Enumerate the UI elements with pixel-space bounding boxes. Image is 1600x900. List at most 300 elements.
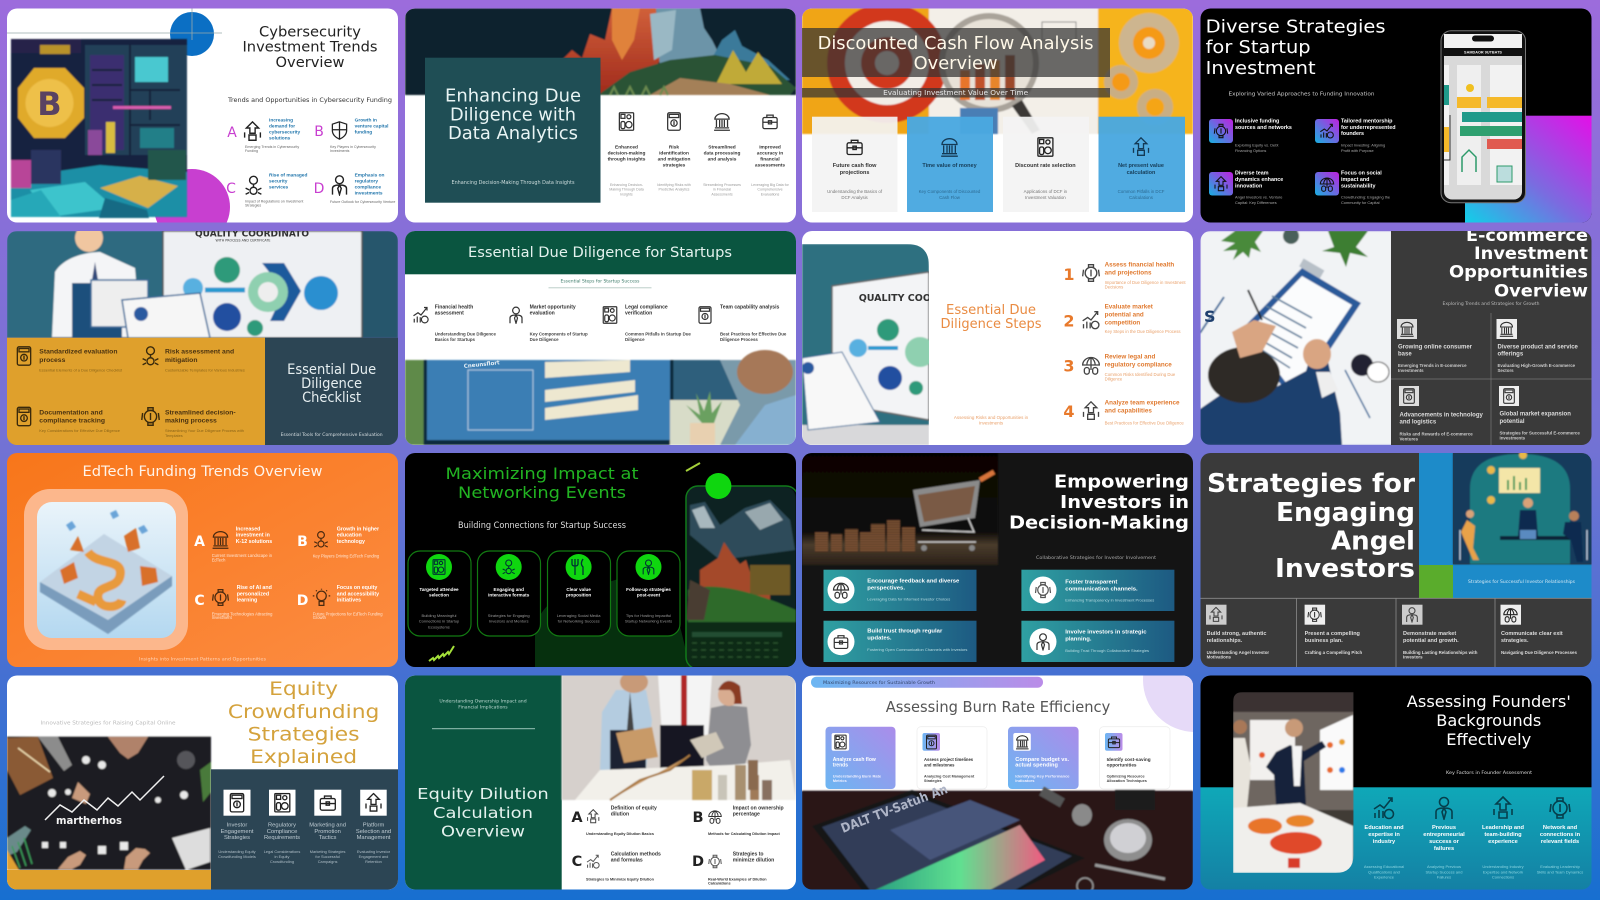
item A: Increased: [236, 526, 260, 532]
cell 4: [1500, 605, 1577, 655]
title: Diligence: [301, 376, 362, 392]
icon: umbrella: [834, 583, 848, 598]
item B: Investments: [330, 149, 350, 153]
item C: [194, 585, 273, 620]
item 1: [414, 304, 496, 342]
image: team reviewing chart: [562, 671, 796, 800]
card 1: Analyze cash flow: [833, 757, 876, 763]
item B: B: [297, 534, 308, 550]
slide 14: equity dilution: [405, 671, 796, 890]
column 2: Legal Considerations: [264, 849, 300, 854]
icon: house: [1084, 402, 1098, 419]
item 4: sustainability: [1341, 183, 1375, 189]
icon: bank: [941, 139, 958, 156]
item A: [571, 805, 657, 836]
title panel: [265, 338, 398, 446]
poster heading: QUALITY COORDINATO: [195, 230, 309, 240]
item C: Emerging Technologies Attracting: [212, 612, 273, 616]
cell 3: Demonstrate market: [1403, 631, 1456, 637]
column 2: [1423, 798, 1465, 880]
column 3: experience: [1488, 839, 1518, 845]
icon: house: [366, 794, 381, 811]
subtitle: Understanding Ownership Impact and: [439, 698, 527, 704]
panel 1: Leveraging Data for Informed Investor Choices: [867, 596, 950, 602]
item C: [226, 172, 307, 208]
item 4: impact and: [1341, 177, 1369, 183]
title: [1407, 692, 1571, 749]
icon: coin hand: [709, 855, 721, 868]
column 2: [264, 790, 300, 864]
cell 3: potential and growth.: [1403, 638, 1459, 644]
item 4: [699, 304, 787, 342]
item C: personalized: [237, 591, 269, 597]
step 2: Evaluate market: [1105, 303, 1154, 310]
item D: Focus on equity: [337, 585, 377, 591]
title: Enhancing Due: [445, 86, 581, 106]
column 2: Key Components of Discounted: [919, 189, 981, 194]
subtitle: Essential Steps for Startup Success: [560, 279, 640, 284]
item B: Key Players Driving EdTech Funding: [313, 554, 380, 558]
logo mark: S: [1204, 307, 1216, 326]
item 1: [608, 113, 646, 196]
item 2: [1315, 118, 1396, 153]
item A: solutions: [269, 136, 291, 142]
item A: EdTech: [212, 558, 226, 562]
subtitle: Evaluating Investment Value Over Time: [883, 89, 1028, 97]
chalk chart line: [45, 776, 164, 820]
card 3: Compare budget vs.: [1015, 757, 1070, 763]
card 3: Identifying Key Performance: [1015, 774, 1070, 779]
title: [446, 464, 638, 502]
column 3: Marketing and: [309, 822, 346, 828]
cell 3: Building Lasting Relationships with: [1403, 650, 1478, 655]
column 1: industry: [1373, 839, 1396, 845]
title: Crowdfunding: [228, 701, 379, 723]
yellow strip: [7, 870, 211, 890]
step 2: potential and: [1105, 311, 1144, 318]
title: E-commerce: [1466, 226, 1588, 245]
icon: coin: [1036, 582, 1050, 598]
item C: Rise of managed: [269, 172, 307, 178]
column 2: Requirements: [264, 835, 300, 841]
column 1: Strategies: [224, 835, 250, 841]
card 2: Strategies: [924, 779, 942, 783]
title: Investors: [1275, 554, 1415, 584]
subtitle overlay: [802, 88, 1110, 98]
decor: squiggle bottom: [429, 646, 454, 661]
image: cyberpunk room: [11, 39, 187, 218]
item 3: dynamics enhance: [1235, 177, 1283, 183]
icon: document: [17, 347, 31, 365]
icon: people: [643, 560, 654, 574]
column 1: Understanding the Basics of: [827, 189, 883, 194]
icon: chart: [1374, 798, 1394, 818]
item 3: Documentation and: [39, 409, 103, 416]
item C: C: [194, 593, 205, 609]
title: Equity Dilution: [417, 785, 549, 803]
card 2: Assess project timelines: [924, 757, 974, 762]
item C: C: [226, 181, 236, 197]
item C: Investment: [212, 615, 233, 620]
title: Effectively: [1446, 730, 1531, 749]
cell 1: relationships.: [1207, 638, 1243, 644]
title: Equity: [269, 678, 338, 700]
card 1: [408, 551, 471, 636]
item 3: Angel Investors vs. Venture: [1235, 194, 1282, 199]
title: Essential Due: [946, 303, 1036, 318]
column 1: expertise in: [1368, 832, 1400, 838]
column 2: Startup Success and: [1426, 869, 1462, 874]
item B: Growth in: [355, 118, 377, 124]
panel 3: updates.: [867, 636, 892, 642]
slide 5: checklist: [7, 224, 398, 446]
item C: Strategies: [245, 204, 261, 208]
item 4: making process: [165, 417, 217, 424]
cell 3: Risks and Rewards of E-commerce: [1400, 432, 1473, 436]
item 3: Diligence: [625, 337, 645, 342]
column 3: Discount rate selection: [1015, 163, 1076, 169]
title: Maximizing Impact at: [446, 464, 638, 483]
column 3: team-building: [1484, 832, 1522, 838]
title: Investment: [1474, 244, 1588, 263]
icon: chess knight: [245, 122, 260, 140]
cell 1: base: [1398, 352, 1412, 358]
item D: initiatives: [337, 598, 361, 604]
column 3: Promotion: [314, 829, 341, 835]
icon: bulb: [313, 589, 330, 605]
item 3: innovation: [1235, 183, 1262, 189]
column 2: Crowdfunding: [270, 859, 294, 864]
item C: Rise of AI and: [237, 585, 272, 591]
step 1: [1063, 262, 1186, 290]
card 2: Engaging and: [494, 587, 524, 592]
icon: shield: [332, 122, 347, 139]
step 4: and capabilities: [1105, 407, 1152, 414]
panel background: [1200, 8, 1592, 222]
item 2: and mitigation: [658, 156, 690, 162]
icon: percent: [587, 855, 599, 868]
left panel: [405, 676, 562, 890]
cell lines: [1391, 313, 1592, 445]
item C: Calculation methods: [611, 852, 661, 858]
title: Overview: [276, 55, 344, 71]
cell 1: [1397, 319, 1473, 373]
icon: document: [926, 735, 936, 749]
title: Diligence Steps: [940, 317, 1042, 332]
icon: calculator: [1038, 138, 1053, 156]
item 2: Key Components of Startup: [530, 332, 588, 336]
image: man at clipboard: [1200, 228, 1392, 445]
column 2: Regulatory: [268, 822, 296, 828]
icon: hand coins: [1308, 608, 1321, 621]
title: Data Analytics: [448, 124, 578, 144]
item 4: [751, 115, 790, 196]
image: monitor form: [405, 350, 796, 445]
decor: squiggle top: [686, 463, 700, 471]
card 2: Analyzing Cost Management: [924, 775, 975, 779]
column 1: Assessing Educational: [1364, 864, 1404, 869]
image: coins and cart: [802, 453, 998, 565]
panel background: [405, 8, 796, 222]
item 2: Impact Investing: Aligning: [1341, 142, 1385, 148]
column 3: Applications of DCF in: [1024, 189, 1068, 194]
title: [445, 86, 581, 144]
item 3: in Financial: [713, 188, 731, 192]
item 3: and analysis: [708, 156, 737, 162]
column 1: Investor: [227, 822, 247, 828]
panel 2: Enhancing Transparency in Investment Processes: [1065, 598, 1154, 602]
item B: Methods for Calculating Dilution Impact: [708, 832, 780, 836]
item 4: accuracy in: [757, 150, 783, 156]
column 1: [812, 117, 898, 212]
icon: bank: [1016, 736, 1029, 749]
card 1: Building Meaningful: [422, 613, 457, 618]
slide 15: burn rate: [802, 628, 1247, 894]
column 4: Net present value: [1118, 163, 1164, 169]
title: Assessing Burn Rate Efficiency: [886, 698, 1110, 716]
card 3: [548, 551, 610, 636]
slide 6: essential due diligence: [405, 231, 796, 445]
item D: Growth: [313, 615, 327, 620]
item C: security: [269, 178, 288, 184]
panel 2: [1021, 570, 1174, 611]
panel background: [802, 231, 1193, 445]
icon: house: [1134, 138, 1148, 155]
item A: A: [227, 125, 237, 141]
icon: checklist: [17, 407, 31, 426]
title: Strategies for: [1207, 469, 1415, 499]
item 4: [1315, 171, 1390, 205]
image: isometric roadmap: [37, 502, 176, 638]
item 3: Common Pitfalls in Startup Due: [625, 332, 691, 336]
item C: Impact of Regulations on Investment: [245, 200, 303, 204]
column 3: Understanding Industry: [1482, 864, 1524, 869]
item 1: Standardized evaluation: [39, 348, 117, 356]
title: [1207, 469, 1415, 584]
icon: chart: [1083, 312, 1099, 329]
card 4: post-event: [637, 593, 661, 598]
column 1: Understanding Equity: [218, 849, 256, 854]
card 1: Targeted attendee: [419, 587, 459, 592]
title: Empowering: [1054, 472, 1189, 492]
icon: house: [1494, 797, 1512, 818]
item 2: Market opportunity: [530, 304, 576, 310]
card 4: opportunities: [1107, 763, 1137, 768]
title overlay: [802, 28, 1110, 77]
title: EdTech Funding Trends Overview: [82, 464, 322, 480]
item B: Growth in higher: [337, 526, 379, 532]
item 3: compliance tracking: [39, 417, 105, 424]
item D: Emphasis on: [355, 172, 385, 178]
column 2: Compliance: [267, 829, 297, 835]
column 4: Common Pitfalls in DCF: [1118, 189, 1165, 194]
cell 4: potential: [1500, 419, 1525, 425]
decor: blue circle: [170, 12, 214, 56]
subtitle: Enhancing Decision-Making Through Data Insights: [452, 180, 575, 186]
icon: document: [1504, 389, 1514, 403]
title: Investors in: [1060, 492, 1189, 513]
title: [1009, 472, 1189, 534]
item A: A: [194, 534, 205, 550]
item B: Key Players in Cybersecurity: [330, 145, 376, 149]
column 4: Engagement and: [359, 854, 388, 859]
title: Overview: [1494, 282, 1588, 300]
icon: briefcase: [763, 115, 777, 129]
title: Overview: [914, 54, 998, 74]
column 2: Time value of money: [922, 163, 978, 169]
item 1: Financing Options: [1235, 148, 1266, 153]
column 4: Selection and: [356, 829, 391, 835]
column 2: success or: [1429, 839, 1460, 845]
item D: [692, 852, 774, 886]
blue caption band: [1453, 564, 1592, 598]
step 1: and projections: [1105, 270, 1152, 277]
icon: officer: [332, 176, 346, 195]
cell 2: business plan.: [1305, 638, 1343, 644]
icon: document: [1404, 389, 1414, 403]
column 4: Network and: [1543, 825, 1578, 831]
column 4: Evaluating Investor: [357, 849, 391, 854]
image: tablet dashboard: [802, 787, 1193, 894]
subtitle: Investments: [979, 420, 1004, 426]
panel 3: Fostering Open Communication Channels with Investors: [867, 647, 967, 652]
title: Angel: [1331, 526, 1415, 556]
item 2: Due Diligence: [530, 337, 559, 342]
title: [1206, 16, 1386, 79]
item B: technology: [337, 539, 365, 545]
item C: C: [572, 854, 582, 870]
title: Overview: [441, 822, 525, 840]
column 2: [907, 117, 993, 212]
card 1: Ecosystems: [428, 624, 450, 629]
subtitle: Exploring Trends and Strategies for Growth: [1442, 301, 1540, 306]
cell 1: Build strong, authentic: [1207, 631, 1266, 637]
column 2: Failures: [1437, 875, 1451, 880]
cell 1: [1206, 605, 1269, 660]
item 4: Leveraging Big Data for: [751, 183, 790, 187]
step 1: 1: [1063, 265, 1075, 284]
item 1: Essential Elements of a Due Diligence Checklist: [39, 368, 123, 372]
panel 2: Foster transparent: [1065, 580, 1117, 586]
item C: and formulas: [611, 858, 643, 864]
cell 3: [1402, 605, 1478, 660]
title panel: [425, 58, 600, 203]
image: presenter: [1233, 692, 1354, 873]
panel background: [7, 453, 398, 667]
title: [1449, 226, 1588, 300]
card 2: [917, 727, 987, 789]
cell 1: Understanding Angel Investor: [1207, 650, 1269, 655]
title: Diverse Strategies: [1206, 16, 1386, 38]
icon: chart: [414, 308, 428, 323]
icon: person: [510, 307, 522, 323]
icon: person: [1436, 798, 1452, 819]
slide 1: cybersecurity: [7, 8, 398, 245]
item 1: Enhancing Decision-: [610, 183, 644, 187]
column 4: [1537, 798, 1583, 874]
column 1: DCF Analysis: [841, 195, 869, 200]
cell 2: [1496, 319, 1579, 373]
subtitle: Essential Tools for Comprehensive Evaluation: [281, 432, 383, 438]
item 3: Key Considerations for Effective Due Diligence: [39, 428, 120, 433]
item 4: Diligence Process: [720, 337, 758, 342]
subtitle: Assessing Risks and Opportunities in: [954, 415, 1029, 420]
panel background: [7, 676, 398, 890]
icon: school: [213, 532, 228, 548]
panel 4: planning.: [1065, 637, 1092, 643]
item 1: Financial health: [435, 304, 473, 310]
slide 8: e-commerce: [1200, 226, 1592, 445]
step 1: Assess financial health: [1105, 262, 1174, 269]
cell 2: Evaluating High-Growth E-commerce: [1498, 363, 1576, 368]
column 4: Skills and Team Dynamics: [1537, 869, 1583, 874]
slide 4: diverse strategies: [1200, 8, 1592, 223]
icon: monitor: [699, 307, 711, 323]
icon: person: [1407, 608, 1417, 622]
decor: dark green shape: [535, 565, 690, 667]
card 3: for Networking Success: [558, 619, 600, 624]
column 4: [1098, 117, 1185, 212]
item B: venture capital: [355, 124, 388, 130]
card 1: Connections in Startup: [419, 619, 460, 624]
item D: regulatory: [355, 178, 378, 184]
step 4: [1063, 399, 1184, 426]
item B: funding: [355, 130, 372, 136]
icon: hand coin: [142, 408, 159, 425]
column 4: Management: [357, 835, 391, 841]
title: Assessing Founders': [1407, 692, 1571, 711]
column 4: [356, 790, 391, 864]
image: data mountains: [405, 8, 796, 95]
bitcoin symbol: B: [37, 85, 62, 123]
icon: calculator: [835, 735, 846, 749]
cell 1: Investments: [1398, 368, 1424, 373]
item B: B: [314, 124, 324, 140]
item 2: Customizable Templates for Various Industries: [165, 368, 245, 372]
item 2: [510, 304, 588, 342]
cell 3: and logistics: [1400, 420, 1437, 426]
item 4: Focus on social: [1341, 171, 1382, 177]
column 4: Retention: [365, 859, 382, 864]
content panel: [1391, 231, 1592, 445]
slide 13: equity crowdfunding: [7, 676, 398, 890]
card 2: Strategies for Engaging: [488, 613, 530, 618]
panel 3: Build trust through regular: [867, 629, 943, 635]
slide 10: networking: [405, 453, 798, 669]
title: [228, 678, 379, 768]
icon: cutlery: [572, 559, 583, 575]
item 4: [142, 408, 244, 438]
slide 3: discounted cash flow: [802, 3, 1193, 222]
slide 12: angel investors: [1200, 451, 1592, 667]
step 2: Key Steps in the Due Diligence Process: [1105, 329, 1181, 334]
column 1: [1364, 798, 1404, 880]
title: Investment: [1206, 58, 1316, 79]
title: Engaging: [1276, 498, 1415, 528]
item B: [692, 805, 784, 836]
item B: B: [692, 810, 704, 826]
item D: D: [692, 854, 704, 870]
decor: magenta circle: [155, 169, 230, 222]
card 3: actual spending: [1015, 763, 1058, 769]
subtitle: Building Connections for Startup Success: [458, 521, 627, 531]
title: Decision-Making: [1009, 512, 1189, 534]
icon: coin: [1550, 798, 1570, 818]
item D: [314, 172, 395, 204]
poster heading: WITH PROCESS AND CERTIFICATE: [216, 238, 270, 242]
slide 7: due diligence steps: [802, 231, 1193, 445]
column 1: [218, 790, 256, 859]
